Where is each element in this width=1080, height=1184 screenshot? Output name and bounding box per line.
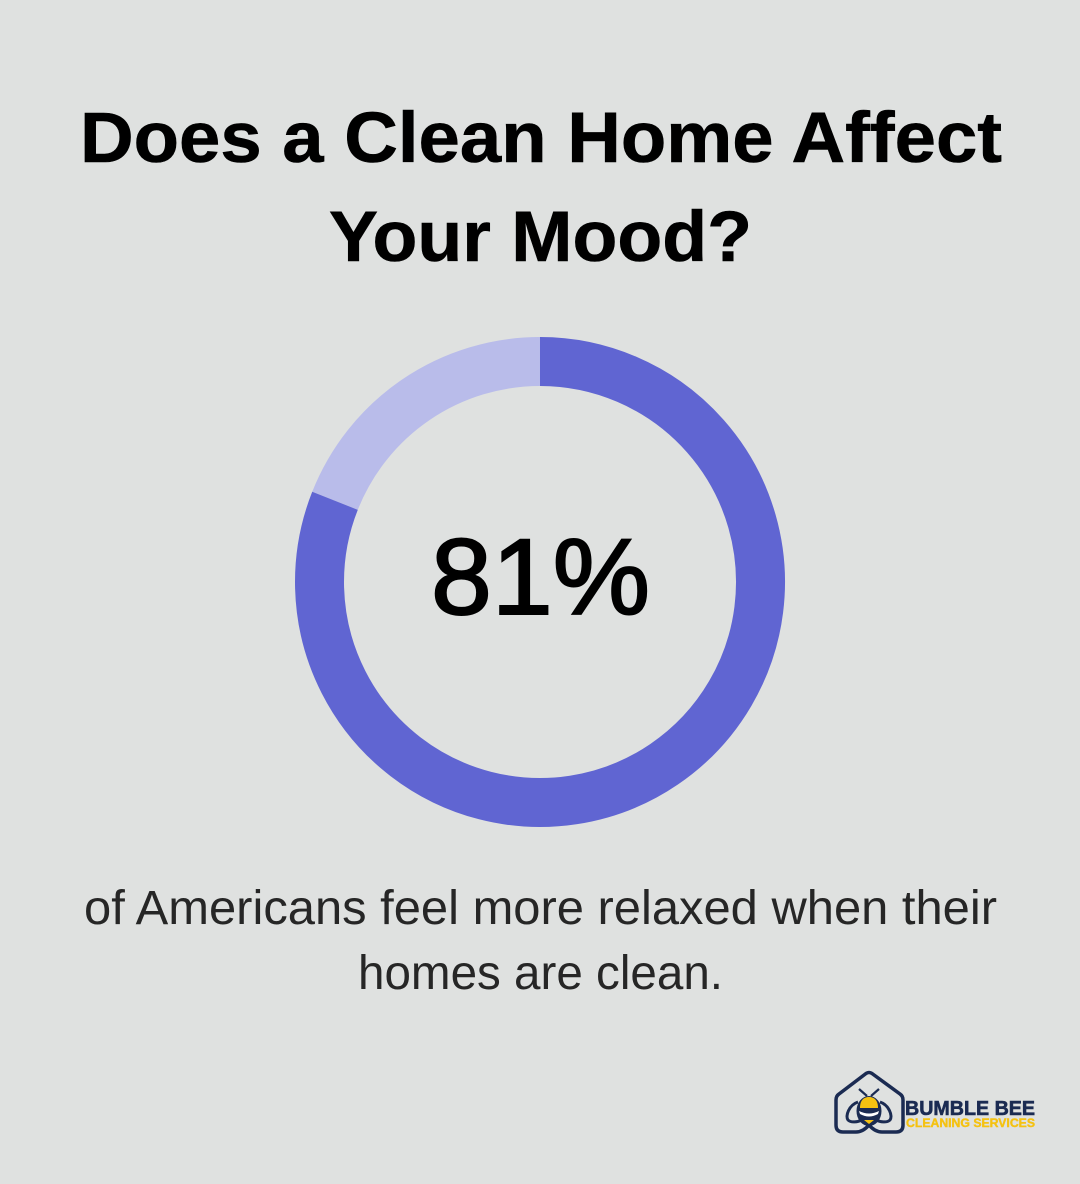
- donut chart: 81%: [320, 362, 761, 802]
- title: Your Mood?: [329, 198, 752, 277]
- description text: [84, 882, 997, 1000]
- statistic: 81%: 81%: [431, 516, 650, 637]
- donut segment: 81%: [320, 362, 761, 802]
- description text: homes are clean.: [358, 947, 723, 1000]
- logo wordmark: BUMBLE BEE: [905, 1098, 1035, 1120]
- donut segment: remaining 19%: [335, 362, 540, 501]
- description text: of Americans feel more relaxed when their: [84, 882, 997, 935]
- logo tagline: CLEANING SERVICES: [906, 1116, 1035, 1130]
- title: [80, 99, 1002, 277]
- logo: Bumble Bee Cleaning Services: [836, 1072, 1035, 1132]
- title: Does a Clean Home Affect: [80, 99, 1002, 178]
- icon: house outline with bee: [836, 1072, 903, 1132]
